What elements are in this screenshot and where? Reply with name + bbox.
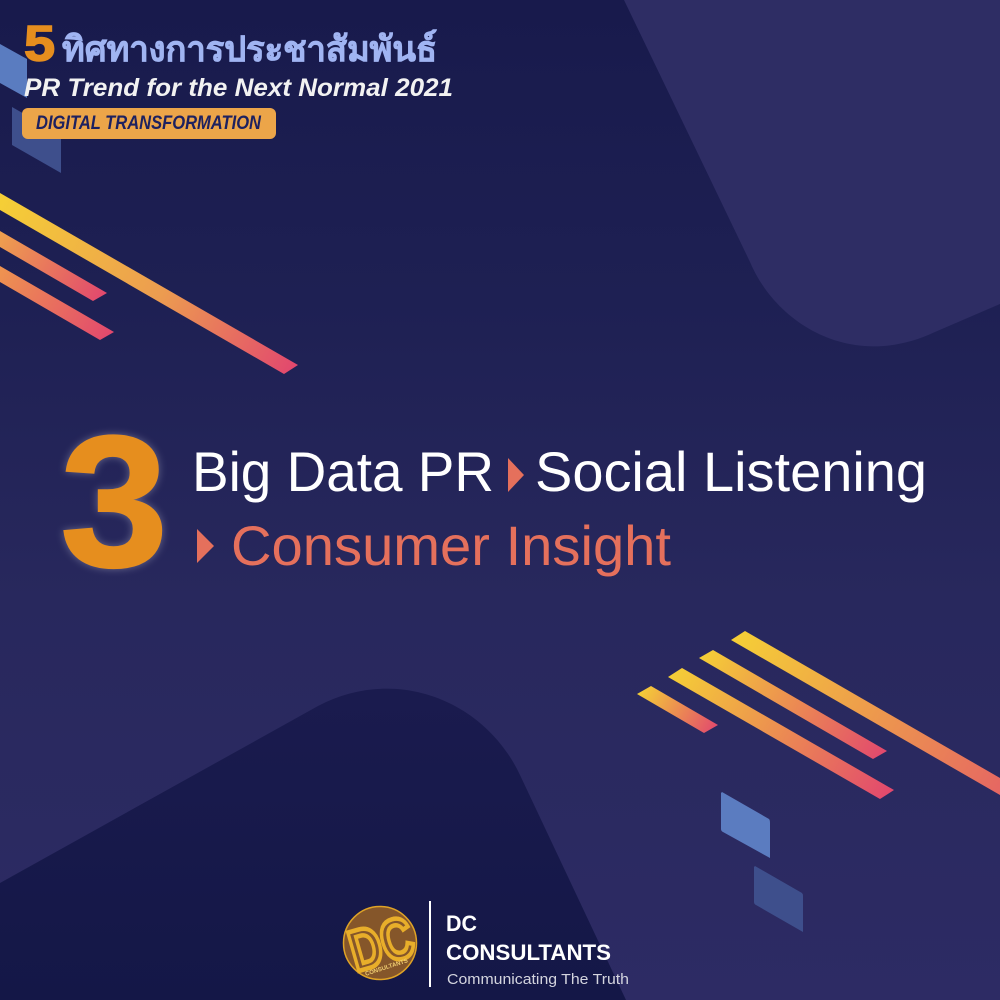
decorative shape: bottom left blob — [0, 689, 626, 1000]
decorative tiles: bottom right — [721, 792, 803, 932]
header Thai title: ทิศทางการประชาสัมพันธ์ — [62, 29, 437, 69]
headline line 1: Big Data PR — [192, 440, 494, 503]
headline line 1 — [192, 440, 927, 503]
headline line 2: Consumer Insight — [231, 514, 671, 577]
headline line 1: Social Listening — [535, 440, 927, 503]
logo emblem: DC — [342, 904, 421, 984]
decorative stripes: top left — [0, 193, 298, 374]
big number 3: 3 — [60, 397, 168, 606]
logo emblem: CONSULTANTS — [365, 958, 409, 978]
arrow: to consumer insight — [197, 529, 214, 563]
header subtitle: PR Trend for the Next Normal 2021 — [24, 74, 453, 102]
header number 5: 5 — [24, 16, 55, 72]
badge: digital transformation — [22, 108, 276, 139]
big number 3: 3 — [60, 397, 168, 606]
logo wordmark: DC — [446, 911, 477, 936]
logo divider — [429, 901, 431, 987]
logo wordmark: Communicating The Truth — [447, 972, 629, 988]
header — [22, 16, 453, 139]
logo wordmark: CONSULTANTS — [446, 940, 611, 965]
logo wordmark — [446, 911, 629, 988]
decorative tiles: top left — [0, 44, 61, 173]
footer logo — [342, 901, 629, 988]
badge: digital transformation: DIGITAL TRANSFORMATION — [36, 113, 262, 134]
arrow: big data to social listening — [508, 458, 524, 492]
decorative shape: top right blob — [624, 0, 1000, 346]
decorative stripes: bottom right — [637, 631, 1000, 799]
